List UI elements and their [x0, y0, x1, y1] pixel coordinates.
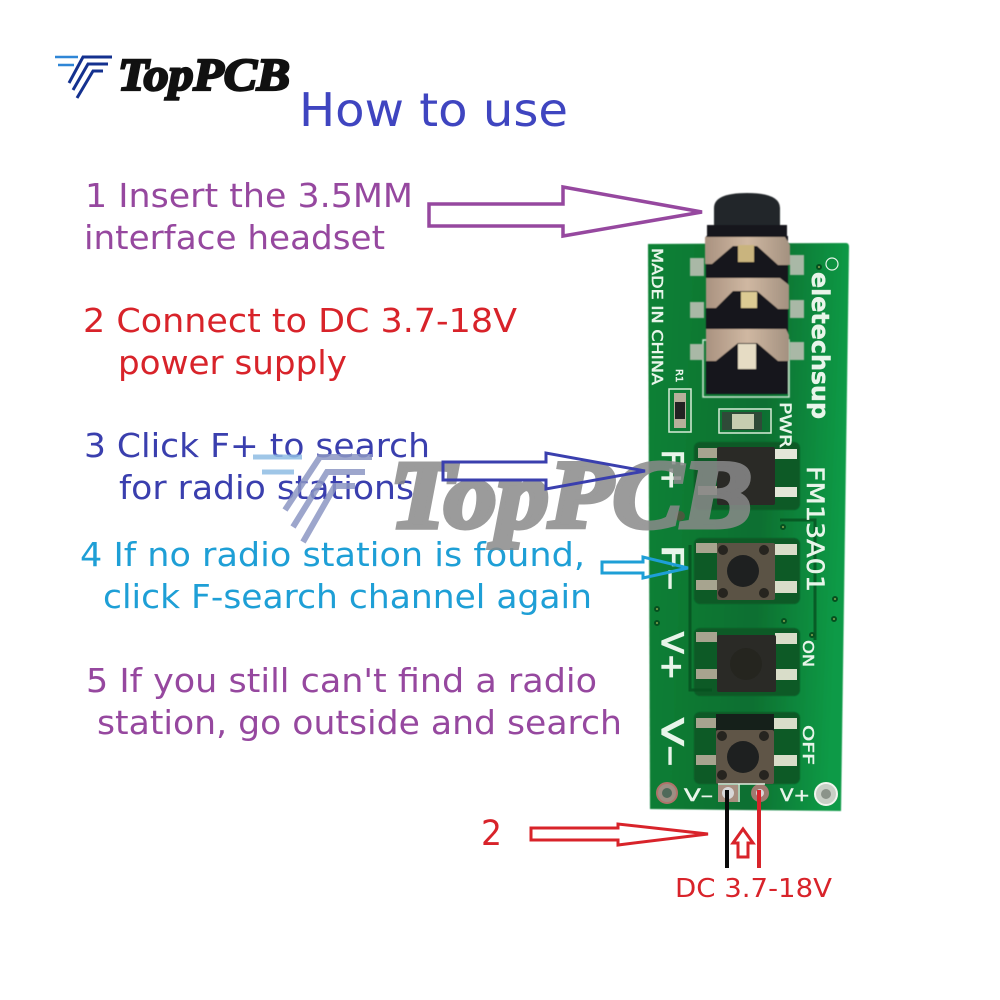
metal clip 1	[705, 237, 790, 265]
audio jack	[690, 193, 804, 397]
step 3 text: 3 Click F+ to search	[84, 426, 430, 465]
metal clip 3	[706, 329, 789, 361]
resistor R1	[669, 369, 691, 432]
watermark icon	[253, 457, 372, 542]
silkscreen labels: FM13A01	[801, 466, 829, 592]
logo icon: blue stripes	[55, 57, 112, 98]
silkscreen labels: OFF	[799, 725, 817, 765]
arrow: small up	[733, 829, 753, 857]
step 3 text: for radio stations	[119, 468, 414, 507]
metal clip 2	[706, 278, 789, 309]
watermark logo: TopPCB	[253, 441, 752, 548]
step 4 text: click F-search channel again	[103, 577, 592, 616]
copper traces	[690, 520, 815, 690]
silkscreen labels: PWR	[776, 402, 795, 448]
button F+	[675, 447, 797, 521]
silkscreen labels: V–	[684, 786, 713, 806]
logo wordmark: TopPCB	[118, 49, 290, 100]
wire: black V-	[725, 790, 729, 868]
title: How to use	[299, 83, 568, 137]
silkscreen labels: V+	[780, 786, 810, 806]
step 1 text: interface headset	[84, 218, 385, 257]
step 2 text: 2 Connect to DC 3.7-18V	[83, 301, 517, 340]
button V+	[696, 632, 797, 692]
label: step 2 marker: 2	[481, 814, 502, 854]
jack collar	[707, 225, 787, 237]
step 4 text: 4 If no radio station is found,	[80, 535, 585, 574]
jack body	[703, 340, 789, 397]
step 2 text: power supply	[118, 343, 347, 382]
top logo: TopPCB	[55, 49, 290, 100]
step 1 text	[84, 176, 413, 257]
step 5 text: 5 If you still can't find a radio	[86, 661, 597, 700]
step 5 text	[86, 661, 622, 742]
vias	[655, 265, 837, 637]
silkscreen labels: MADE IN CHINA	[648, 248, 666, 386]
PWR LED	[719, 409, 771, 433]
circuit board module	[648, 193, 849, 811]
silkscreen labels: F+	[655, 450, 689, 490]
solder pads	[690, 255, 804, 360]
silkscreen labels: V–	[655, 718, 689, 766]
mounting holes and solder pads	[657, 783, 837, 805]
silkscreen labels: ON	[799, 640, 817, 667]
arrow: to F+ button	[443, 453, 645, 489]
step 5 text: station, go outside and search	[97, 703, 622, 742]
arrow: to F- button	[602, 557, 688, 578]
step 3 text	[84, 426, 430, 507]
step 2 text	[83, 301, 517, 382]
silkscreen labels: eletechsup	[806, 272, 834, 419]
board substrate	[648, 243, 849, 811]
dark copper areas	[694, 442, 800, 784]
button F-	[696, 543, 797, 600]
arrow: to power pins	[531, 824, 708, 845]
resistor R1: R1	[673, 369, 684, 382]
silkscreen labels: F–	[655, 545, 689, 590]
jack barrel	[714, 193, 780, 230]
watermark wordmark: TopPCB	[390, 441, 752, 548]
silkscreen labels: V+	[655, 632, 689, 680]
label: DC voltage: DC 3.7-18V	[675, 874, 832, 904]
step 4 text	[80, 535, 592, 616]
button V-	[696, 714, 797, 784]
step 1 text: 1 Insert the 3.5MM	[85, 176, 413, 215]
wire: red V+	[757, 790, 761, 868]
silkscreen labels	[648, 248, 838, 806]
arrow: to headphone jack	[429, 187, 702, 236]
